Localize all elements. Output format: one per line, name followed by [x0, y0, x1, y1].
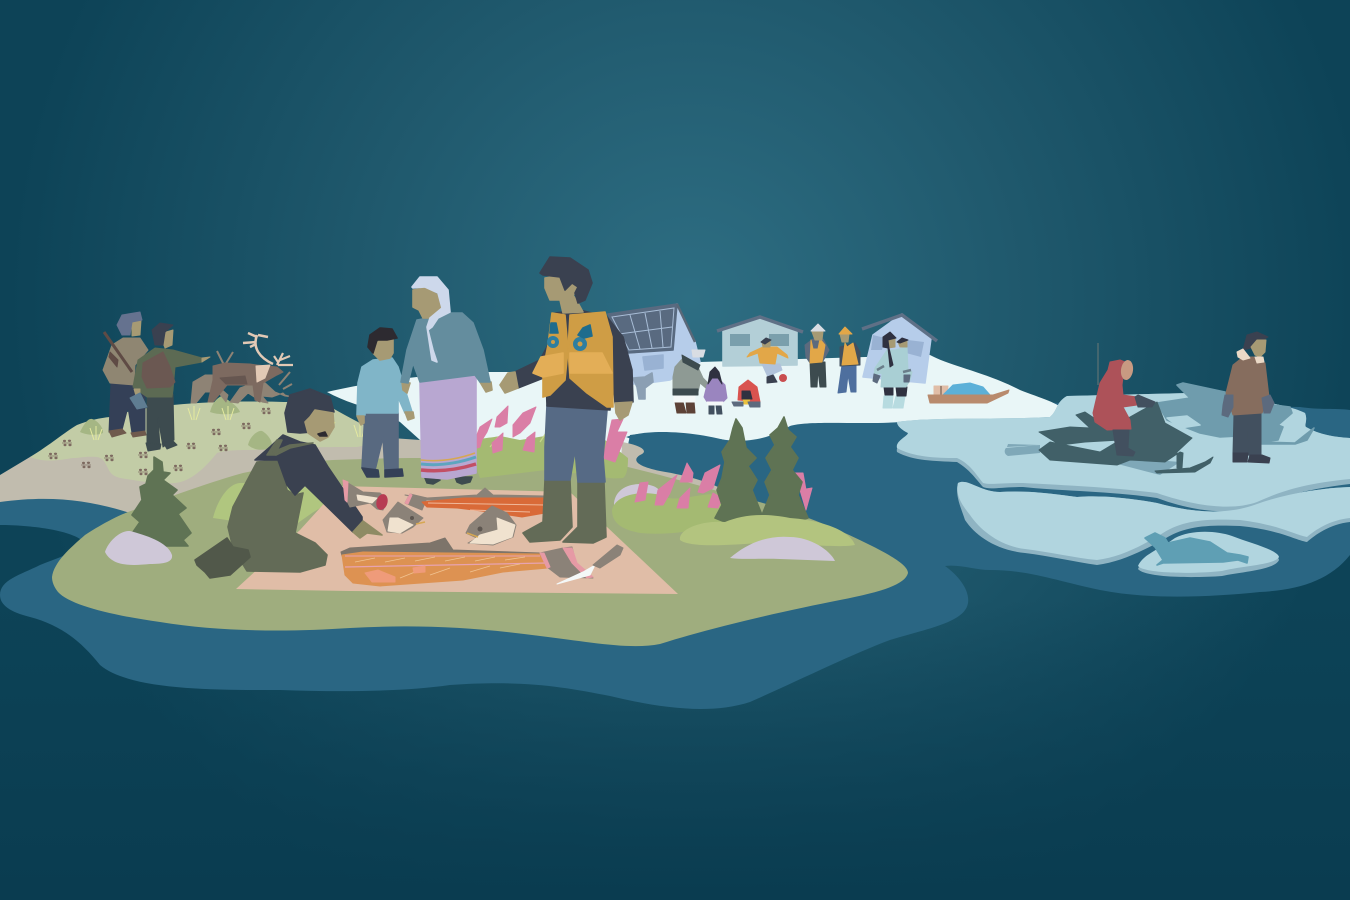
head: [285, 389, 334, 433]
beadwork flowers: [547, 323, 592, 351]
knife: [557, 565, 595, 584]
back caribou: [191, 375, 228, 403]
rock: left: [105, 531, 172, 565]
snow: [327, 355, 1066, 470]
snowmobile rider: [1039, 343, 1213, 473]
tail left: [343, 480, 387, 510]
blanket: [236, 486, 678, 594]
rock behind fireweed: [614, 484, 660, 505]
front caribou: [208, 363, 283, 402]
ice shadow: [1005, 383, 1314, 475]
beach patch near grandmother: [370, 440, 425, 462]
fish and fillets on blanket: [341, 480, 623, 586]
fireweed: [476, 406, 812, 510]
head: [545, 275, 583, 313]
houses: [608, 304, 937, 384]
hands: [500, 372, 518, 393]
child in blue shirt: [357, 328, 414, 477]
shirt: [255, 435, 362, 532]
grandmother: [401, 277, 492, 484]
construction workers: [805, 324, 860, 393]
seal: [1145, 533, 1248, 565]
ice floe: lower: [957, 482, 1350, 565]
tundra grass: [90, 406, 366, 440]
caribou herd: [191, 333, 293, 403]
dog: [633, 373, 653, 399]
sled: [928, 383, 1009, 403]
elder: [673, 350, 710, 413]
standing man on ice: [1222, 332, 1274, 463]
pond: [626, 430, 800, 500]
arms / shirt: [515, 310, 633, 410]
bush: bright green behind man: [213, 482, 325, 528]
woman carrying baby: [873, 332, 912, 408]
tracks: caribou footprints: [48, 408, 271, 475]
ice floe: seal floe: [1138, 532, 1279, 577]
hunters and caribou: [103, 312, 293, 451]
mitt: [1135, 395, 1155, 407]
pointing hunter: [130, 323, 210, 451]
boy playing soccer: [747, 338, 788, 383]
spruce pair: [715, 417, 808, 524]
beach: [0, 420, 500, 530]
sitting man: [195, 389, 382, 578]
boots: [523, 480, 572, 542]
boots: [195, 538, 250, 578]
bush: fireweed meadow centre: [476, 430, 731, 534]
hand: [353, 521, 382, 538]
vest: [543, 313, 568, 397]
snowmobile: [1039, 402, 1192, 468]
island: [52, 457, 908, 646]
beach bank: [620, 442, 735, 495]
head 1: [383, 502, 423, 533]
hill: tundra: [30, 401, 400, 483]
blue house: [862, 314, 937, 383]
tundra shrubs: [80, 396, 272, 450]
standing man with vest: [500, 257, 633, 543]
water: [0, 400, 1350, 709]
house with solar panels: [608, 304, 700, 384]
hunter with rifle: [103, 312, 148, 437]
big fillet: [341, 538, 540, 556]
elder and child: [673, 350, 727, 414]
child with braids: [704, 367, 727, 414]
jeans: [545, 405, 607, 482]
campfire: [732, 380, 760, 407]
red parka: [1093, 360, 1137, 430]
rock: right: [730, 537, 835, 561]
grey house: [717, 317, 803, 366]
waders: [228, 460, 327, 572]
top fillet: [405, 488, 545, 500]
head 2: [466, 506, 516, 545]
tree: left spruce: [132, 457, 191, 546]
ice floe: upper: [897, 393, 1350, 511]
bush: front right: [680, 515, 855, 546]
